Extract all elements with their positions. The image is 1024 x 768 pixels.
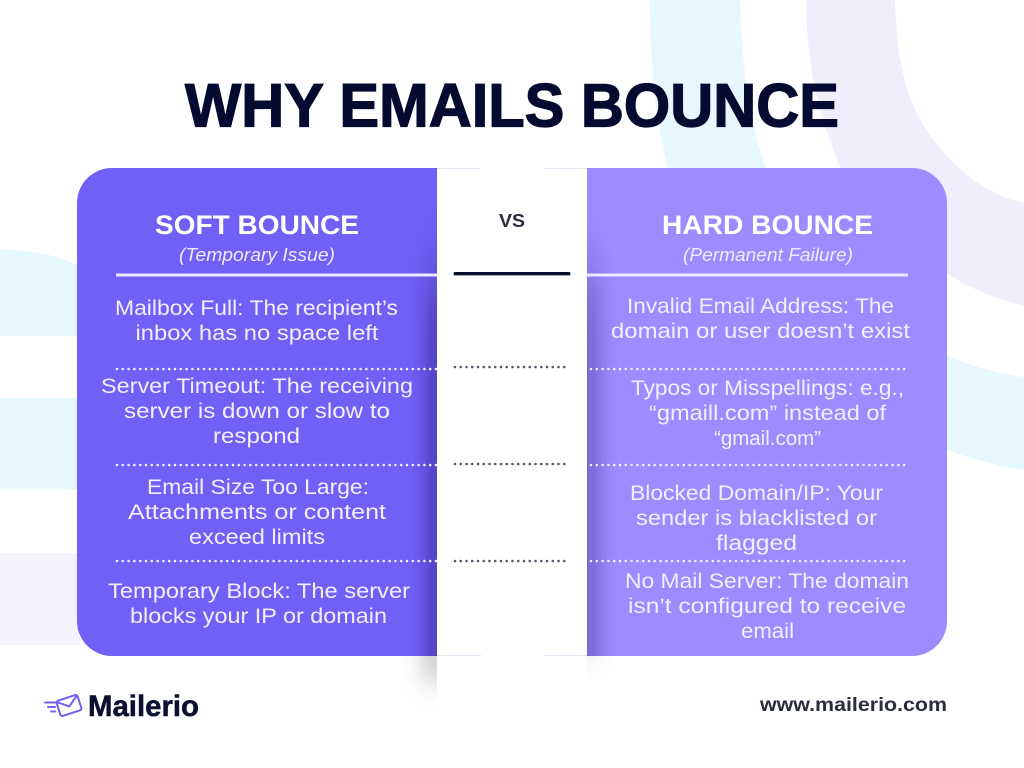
heading dividers [116,274,908,276]
item: server timeout: server is down or slow to [124,400,390,423]
item: no mail server [625,570,909,643]
item: temporary block: Temporary Block: The server [108,580,410,603]
item: blocked domain [630,482,883,555]
item: server timeout: Server Timeout: The receiving [101,375,413,398]
item: email size: Email Size Too Large: [147,476,369,499]
item: mailbox full [115,297,398,345]
item: invalid email: Invalid Email Address: The [627,295,894,318]
hard bounce heading: HARD BOUNCE [662,210,873,240]
soft bounce heading: SOFT BOUNCE [155,210,359,240]
item: blocked domain: flagged [716,532,797,555]
item: invalid email: domain or user doesn’t exist [611,320,910,343]
item: server timeout [101,375,413,448]
panel: hard bounce [587,168,947,656]
hard bounce subtitle: (Permanent Failure) [683,245,853,265]
item: no mail server: email [741,620,794,643]
item: temporary block: blocks your IP or domain [130,605,387,628]
item: mailbox full: inbox has no space left [136,322,379,345]
item: blocked domain: sender is blacklisted or [636,507,877,530]
wordmark: Mailerio [88,690,199,723]
item: invalid email [611,295,910,343]
item: blocked domain: Blocked Domain/IP: Your [630,482,883,505]
item: no mail server: No Mail Server: The domain [625,570,909,593]
logo: mailerio [45,690,199,723]
item: no mail server: isn’t configured to receive [628,595,906,618]
soft bounce subtitle: (Temporary Issue) [179,245,335,265]
item: temporary block [108,580,410,628]
title: WHY EMAILS BOUNCE [185,72,839,140]
item: mailbox full: Mailbox Full: The recipient’s [115,297,398,320]
item: email size: exceed limits [189,526,325,549]
vs underline [454,272,570,275]
item: typos [631,377,904,450]
centre column: vs [437,168,587,656]
item: typos: Typos or Misspellings: e.g., [631,377,904,400]
vs label: VS [499,211,525,231]
dotted dividers [117,369,906,561]
icon: envelope [45,694,82,717]
item: server timeout: respond [213,425,300,448]
item: typos: “gmaill.com” instead of [649,402,886,425]
panel shadows [425,275,594,715]
item: typos: “gmail.com” [714,428,821,450]
website url: www.mailerio.com [759,695,947,716]
item: email size [128,476,386,549]
item: email size: Attachments or content [128,501,386,524]
panel: soft bounce [77,168,437,656]
